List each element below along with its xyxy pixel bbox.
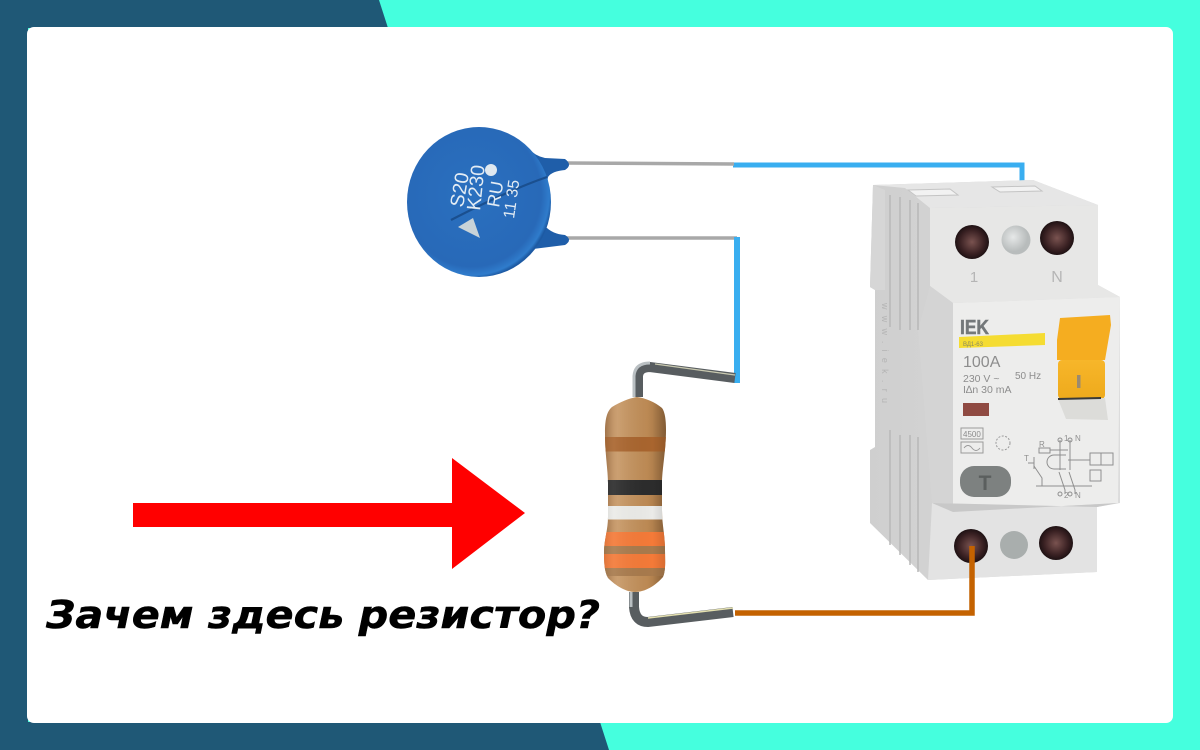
icon: residual current breaker: N bbox=[1075, 434, 1081, 443]
icon: residual current breaker bbox=[870, 180, 1120, 580]
body bbox=[604, 397, 666, 592]
switch bbox=[1057, 315, 1111, 360]
breaker shaded waist bbox=[918, 286, 953, 512]
rating boxes bbox=[961, 428, 1010, 453]
background: dark blue left and bottom shape bbox=[0, 0, 609, 750]
bands bbox=[604, 404, 666, 586]
test button bbox=[960, 466, 1011, 497]
icon: resistor bbox=[600, 363, 735, 622]
icon: residual current breaker: 2 bbox=[1064, 491, 1069, 500]
yellow label bbox=[959, 333, 1045, 348]
icon: residual current breaker: 1 bbox=[1064, 434, 1069, 443]
wire: blue top bbox=[733, 165, 1022, 192]
brand logo: IEK bbox=[960, 317, 989, 339]
wire: blue right drop bbox=[734, 237, 740, 383]
breaker ridges bbox=[890, 195, 918, 572]
breaker mid front bbox=[953, 297, 1120, 512]
icon: residual current breaker: R bbox=[1039, 440, 1045, 449]
icon: varistor: RU bbox=[483, 180, 507, 209]
circuit diagram bbox=[1028, 438, 1113, 496]
title: Зачем здесь резистор? bbox=[45, 593, 600, 638]
lead bottom bbox=[634, 592, 733, 622]
breaker top surface bbox=[873, 180, 1098, 208]
top slots bbox=[908, 189, 958, 196]
test button: T bbox=[979, 472, 992, 495]
ratings: 230 V ~ bbox=[963, 373, 1000, 385]
ratings: 100A bbox=[963, 354, 1001, 371]
wire: orange bbox=[735, 546, 972, 613]
icon: varistor: S20 bbox=[446, 171, 474, 209]
arrow: red bbox=[133, 458, 525, 569]
wire: grey varistor leads bbox=[565, 163, 737, 238]
terminals top bbox=[955, 225, 989, 259]
icon: residual current breaker: N bbox=[1075, 491, 1081, 500]
icon: residual current breaker: T bbox=[1024, 454, 1029, 463]
icon: varistor: 11 35 bbox=[501, 179, 523, 220]
icon: residual current breaker: 4500 bbox=[963, 430, 981, 439]
embossed side text: www.iek.ru bbox=[880, 302, 890, 403]
terminals bottom bbox=[954, 529, 988, 563]
icon: residual current breaker: N bbox=[1051, 269, 1063, 286]
window bbox=[963, 403, 989, 416]
ratings: 50 Hz bbox=[1015, 371, 1041, 382]
ratings bbox=[963, 354, 1041, 396]
lead top bbox=[638, 367, 735, 397]
breaker side bbox=[870, 180, 1120, 580]
breaker upper front bbox=[930, 205, 1120, 303]
icon: varistor bbox=[407, 127, 569, 277]
icon: varistor: K230 bbox=[463, 164, 490, 212]
background: dark blue corner shape top bbox=[0, 0, 388, 28]
breaker lower front bbox=[928, 503, 1097, 580]
ratings: I∆n 30 mA bbox=[963, 384, 1011, 396]
icon: residual current breaker: ВД1-63 bbox=[963, 342, 984, 348]
terminal labels: 1 bbox=[970, 269, 978, 286]
